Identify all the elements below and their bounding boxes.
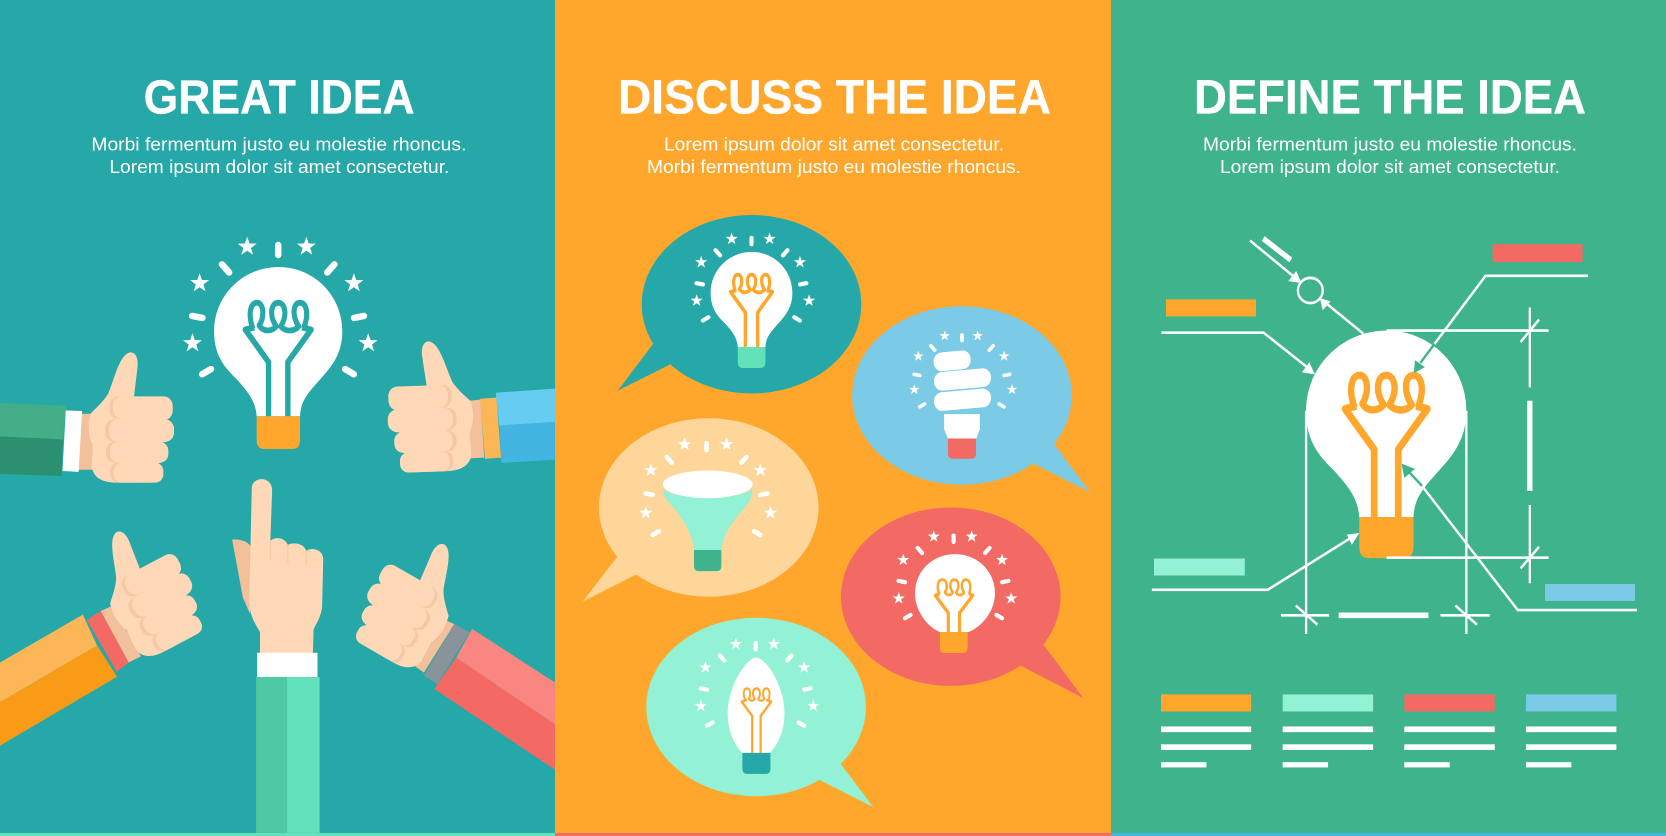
panel: great idea xyxy=(0,0,555,836)
text block: define description xyxy=(1203,134,1577,177)
text block: define description: Lorem ipsum dolor sit amet consectetur. xyxy=(1220,156,1560,177)
diagram: annotated blueprint bulb xyxy=(1152,239,1637,634)
icon: shining light bulb xyxy=(183,237,378,449)
panel: discuss the idea xyxy=(555,0,1111,836)
label bar: blue xyxy=(1545,584,1635,601)
speech bubble: teal with classic bulb xyxy=(618,215,861,393)
label bar: red xyxy=(1493,244,1583,262)
hand: thumbs up green sleeve xyxy=(0,352,174,483)
text block: great idea description xyxy=(91,134,466,177)
label bar: orange xyxy=(1166,299,1256,316)
hand: thumbs up red sleeve xyxy=(344,523,555,770)
text block: discuss description: Lorem ipsum dolor sit amet consectetur. xyxy=(664,134,1004,154)
speech bubble: blue with spiral bulb xyxy=(852,306,1090,492)
speech bubble: mint with candle bulb xyxy=(646,618,873,807)
legend: four colour-keyed text columns xyxy=(1161,694,1616,767)
hand: pointing up green sleeve xyxy=(232,479,323,833)
title: great idea: GREAT IDEA xyxy=(144,72,415,124)
bottom strip: red xyxy=(555,833,1111,836)
hand: thumbs up orange sleeve xyxy=(0,512,214,746)
bottom strip: blue xyxy=(1111,833,1666,836)
text block: discuss description: Morbi fermentum justo eu molestie rhoncus. xyxy=(647,156,1021,177)
speech bubble: red with round bulb xyxy=(841,507,1083,698)
legend column: mint xyxy=(1283,694,1373,767)
legend column: red xyxy=(1404,694,1495,767)
hand: thumbs up blue sleeve xyxy=(385,340,555,473)
label bar: mint xyxy=(1154,558,1245,576)
diagram lines and arrows xyxy=(1152,239,1637,634)
title: discuss the idea: DISCUSS THE IDEA xyxy=(618,72,1051,124)
icon: large bulb xyxy=(1306,331,1466,558)
bottom strip: mint xyxy=(0,833,555,836)
text block: discuss description xyxy=(647,134,1021,177)
text block: great idea description: Morbi fermentum justo eu molestie rhoncus. xyxy=(91,134,466,154)
text block: define description: Morbi fermentum justo eu molestie rhoncus. xyxy=(1203,134,1577,154)
speech bubble: peach with reflector bulb xyxy=(583,418,819,602)
text block: great idea description: Lorem ipsum dolor sit amet consectetur. xyxy=(109,156,449,177)
legend column: blue xyxy=(1526,694,1616,767)
panel: define the idea xyxy=(1111,0,1666,836)
legend column: orange xyxy=(1161,694,1251,767)
title: define the idea: DEFINE THE IDEA xyxy=(1194,72,1586,124)
